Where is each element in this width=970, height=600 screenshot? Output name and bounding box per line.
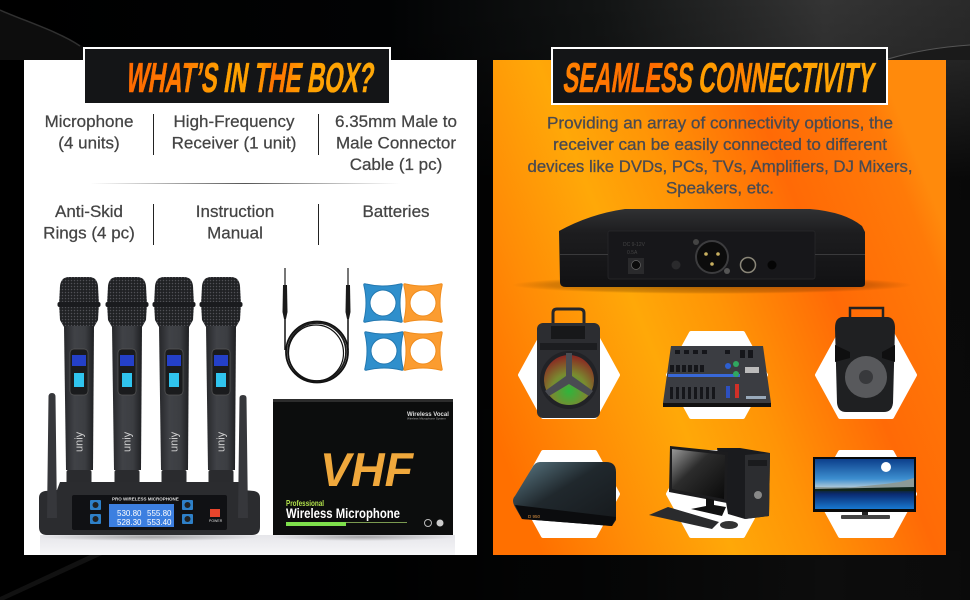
- receiver base: 555.80: [147, 509, 172, 518]
- item labels: [43, 112, 457, 242]
- icon: mixer: [663, 346, 771, 407]
- connectivity description: [528, 114, 912, 198]
- receiver base: 530.80: [117, 509, 142, 518]
- microphone 3: uniy: [168, 431, 180, 452]
- item labels: Anti-Skid: [55, 202, 123, 221]
- receiver rear view: [512, 209, 912, 294]
- antennas: [47, 393, 248, 518]
- icon: party speaker: [537, 309, 600, 418]
- item labels: Receiver (1 unit): [172, 134, 296, 152]
- product box: [273, 399, 453, 535]
- icon: desktop computer: [649, 446, 770, 529]
- product box: VHF: [320, 443, 414, 496]
- product box: Professional: [286, 498, 324, 508]
- receiver base: 528.30: [117, 518, 142, 527]
- icon: media player: D 950: [528, 514, 541, 519]
- hexagon: audio mixer: [663, 333, 771, 417]
- microphone 4: [200, 277, 242, 484]
- microphone 3: [152, 277, 196, 484]
- panel: what's in the box: [24, 60, 477, 555]
- connectivity description: devices like DVDs, PCs, TVs, Amplifiers, DJ Mixers,: [528, 157, 912, 176]
- hexagon: speaker: [520, 309, 618, 418]
- hexagon: PA speaker: [817, 308, 915, 417]
- item labels: Batteries: [362, 202, 430, 221]
- item labels: 6.35mm Male to: [335, 112, 457, 131]
- hexagon: television: [813, 452, 916, 536]
- item labels: Cable (1 pc): [350, 155, 442, 174]
- item labels: (4 units): [58, 134, 120, 152]
- heading: seamless connectivity: [552, 48, 887, 104]
- panel: seamless connectivity: [493, 60, 946, 555]
- receiver base: PRO WIRELESS MICROPHONE: [112, 496, 179, 502]
- connector cable: [282, 268, 350, 382]
- item labels: Instruction: [196, 202, 274, 221]
- icon: television: [813, 457, 916, 519]
- product box: Wireless Microphone System: [407, 416, 446, 420]
- microphone 1: uniy: [74, 431, 86, 452]
- item labels: Microphone: [45, 112, 133, 131]
- heading: what's in the box: [84, 48, 390, 104]
- product box: Wireless Vocal: [407, 412, 449, 418]
- microphone 2: uniy: [122, 431, 134, 452]
- receiver base: 553.40: [147, 518, 172, 527]
- receiver rear view: DC 9-12V: [623, 242, 646, 248]
- floor reflection: [40, 533, 455, 555]
- connectivity description: Providing an array of connectivity options, the: [547, 114, 893, 132]
- hexagon: desktop computer: [649, 446, 770, 536]
- item labels: Manual: [207, 224, 263, 242]
- item labels: Male Connector: [336, 134, 456, 152]
- receiver rear view: 0.5A: [627, 250, 638, 256]
- microphone 4: uniy: [216, 431, 228, 452]
- connectivity description: receiver can be easily connected to different: [553, 135, 887, 154]
- heading: what's in the box: WHAT’S IN THE BOX?: [124, 54, 378, 101]
- icon: PA speaker: [835, 308, 895, 412]
- receiver base: [39, 482, 260, 535]
- connectivity description: Speakers, etc.: [666, 178, 774, 198]
- receiver base: POWER: [209, 519, 223, 523]
- product box: Wireless Microphone: [286, 506, 400, 521]
- microphones: [58, 277, 242, 484]
- microphone 1: [58, 277, 100, 484]
- item labels: High-Frequency: [174, 112, 295, 131]
- anti-skid rings: [364, 284, 442, 370]
- hexagon: media player: [513, 452, 618, 536]
- microphone 2: [106, 277, 148, 484]
- item labels: Rings (4 pc): [43, 224, 135, 242]
